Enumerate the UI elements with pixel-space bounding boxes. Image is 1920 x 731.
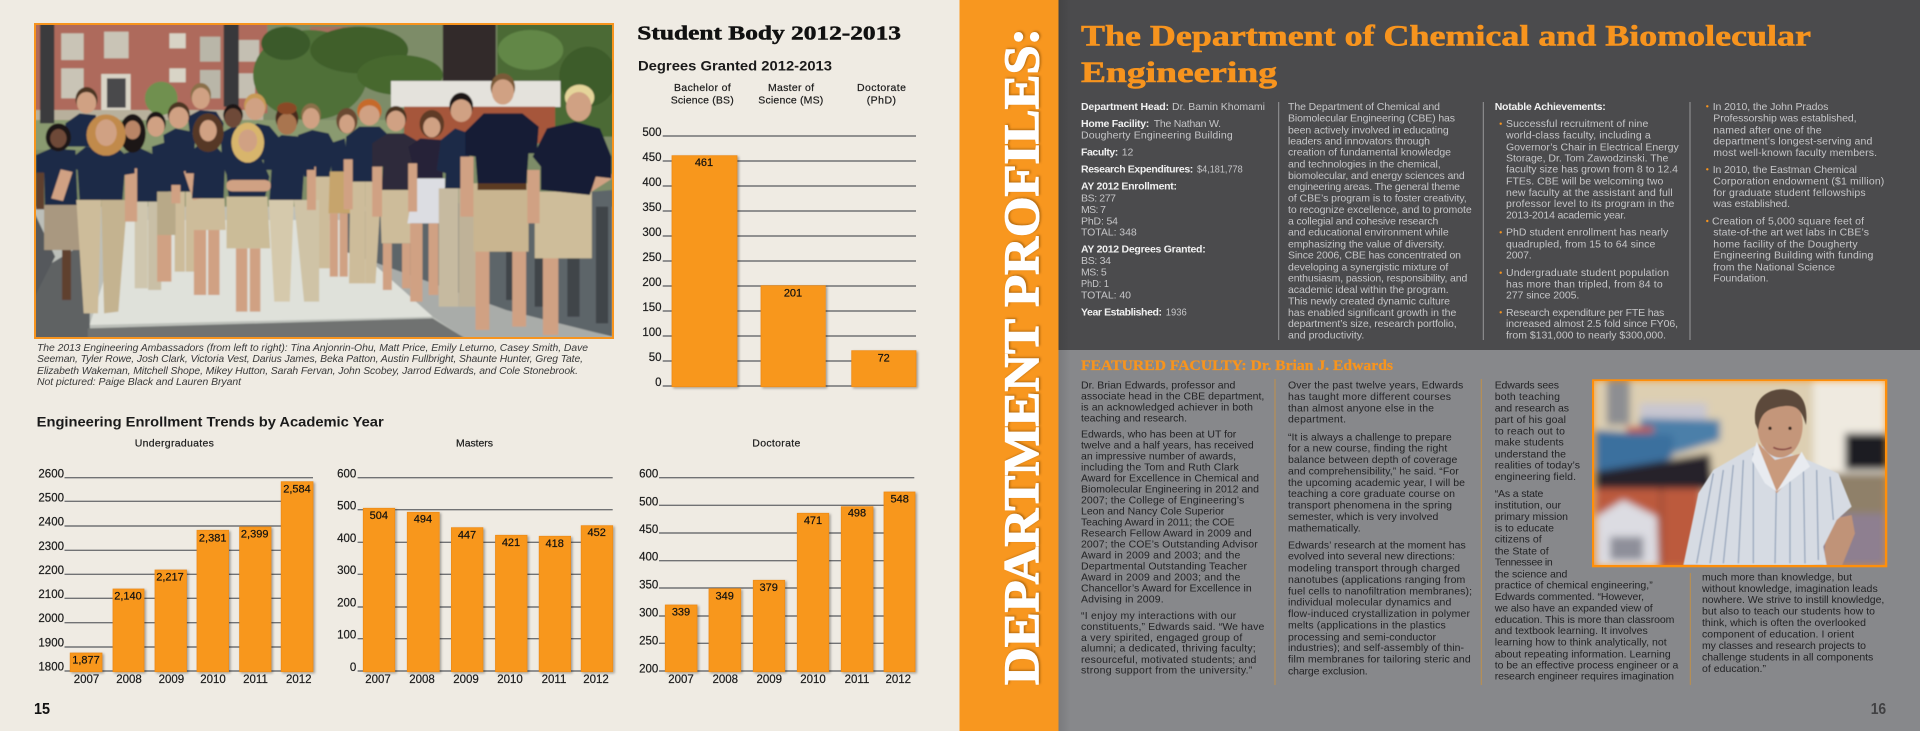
- orange spine band with vertical title: DEPARTMENT PROFILES:: [993, 28, 1049, 685]
- faculty text column 3: education. This is more than classroom: [1495, 614, 1675, 626]
- department description: This newly created dynamic culture: [1288, 295, 1450, 307]
- notable achievements: professor level to its program in the: [1506, 198, 1674, 210]
- notable achievements: In 2010, the John Prados: [1713, 101, 1828, 113]
- faculty text column 1: constituents,” Edwards said. “We have: [1081, 621, 1264, 633]
- bar chart: Undergraduates: 2100: [38, 589, 64, 601]
- bar chart: Masters: 400: [337, 533, 356, 545]
- bar chart: Undergraduates: 2000: [38, 613, 64, 625]
- notable achievements: Notable Achievements:: [1495, 101, 1606, 113]
- bar values: 201: [784, 288, 802, 300]
- faculty text column 2: balance between depth of coverage: [1288, 454, 1457, 466]
- faculty text column 2: Edwards’ research at the moment has: [1288, 540, 1466, 552]
- bar chart: Doctorate: 2007: [668, 674, 694, 686]
- bar chart: Undergraduates: 2600: [38, 468, 64, 480]
- department description: engineering areas. The general theme: [1288, 181, 1460, 193]
- notable achievements: new faculty at the assistant and full: [1506, 187, 1673, 199]
- department description: of CBE’s program is to foster creativity,: [1288, 192, 1467, 204]
- faculty text column 2: mathematically.: [1288, 523, 1361, 535]
- bar chart: Masters: 300: [337, 565, 356, 577]
- page number 16: 16: [1871, 701, 1887, 718]
- faculty text column 2: department.: [1288, 414, 1346, 426]
- bar chart: Masters: 2007: [365, 674, 391, 686]
- bar chart: Undergraduates: 2009: [159, 674, 184, 686]
- faculty text column 4: my classes and research projects to: [1702, 640, 1866, 652]
- department title: Engineering: [1081, 56, 1277, 89]
- faculty text column 1: is an acknowledged achiever in both: [1081, 401, 1253, 413]
- faculty text column 3: institution, our: [1495, 500, 1562, 512]
- faculty text column 1: Leon and Nancy Cole Superior: [1081, 506, 1225, 518]
- bar values: 461: [695, 157, 713, 169]
- faculty text column 1: Departmental Outstanding Teacher: [1081, 561, 1248, 573]
- bar chart: Masters: 504: [370, 510, 388, 522]
- faculty text column 1: twelve and a half years, has received: [1081, 440, 1254, 452]
- faculty text column 3: make students: [1495, 437, 1564, 449]
- bar chart: Masters: 100: [337, 630, 356, 642]
- photo: 2013 Engineering Ambassadors group: [34, 23, 616, 340]
- photo: Dr. Brian J. Edwards: [1592, 379, 1887, 567]
- column labels: Science (BS): [671, 94, 734, 106]
- bar chart: Masters: 2011: [542, 674, 566, 686]
- bar chart: Undergraduates: 2008: [116, 674, 142, 686]
- faculty text column 1: Award in 2009 and 2003; and the: [1081, 550, 1240, 562]
- column labels: (PhD): [867, 94, 896, 106]
- faculty text column 1: including the Tom and Ruth Clark: [1081, 462, 1239, 474]
- faculty text column 2: transport phenomena in the spring: [1288, 500, 1452, 512]
- heading: Enrollment Trends: Engineering Enrollment Trends by Academic Year: [37, 415, 385, 430]
- department facts: TOTAL: 40: [1081, 289, 1131, 301]
- column labels: Master of: [768, 82, 814, 94]
- faculty text column 2: has taught more different courses: [1288, 391, 1451, 403]
- notable achievements: was established.: [1712, 198, 1790, 210]
- photo caption: Seeman, Tyler Rowe, Josh Clark, Victoria Vest, Darius James, Beka Patton, Austin Fullbright, Shaunte Hunter, Greg Tate,: [37, 354, 583, 365]
- notable achievements: 2013-2014 academic year.: [1506, 210, 1626, 222]
- bar chart: Doctorate: 471: [804, 515, 822, 527]
- faculty text column 1: 2007; the COE’s Outstanding Advisor: [1081, 539, 1258, 551]
- faculty text column 4: without knowledge, imagination leads: [1701, 583, 1878, 595]
- page number 15: 15: [34, 701, 50, 718]
- bar chart: Masters: 421: [502, 537, 520, 549]
- heading: Student Body: Student Body 2012-2013: [637, 22, 901, 44]
- department description: creation of fundamental knowledge: [1288, 147, 1451, 159]
- faculty text column 1: [1081, 379, 1264, 677]
- notable achievements: state-of-the art wet labs in CBE’s: [1713, 227, 1869, 239]
- bar chart: Masters: 494: [414, 514, 432, 526]
- bar chart: Undergraduates: 2200: [38, 565, 64, 577]
- faculty text column 3: realities of today’s: [1495, 459, 1580, 471]
- faculty text column 3: both teaching: [1495, 391, 1560, 403]
- notable achievements: increased almost 2.5 fold since FY06,: [1506, 318, 1678, 330]
- faculty text column 2: “It is always a challenge to prepare: [1288, 431, 1452, 443]
- faculty text column 3: Edwards sees: [1495, 379, 1559, 391]
- notable achievements: [1495, 101, 1884, 341]
- photo caption: Elizabeth Wakeman, Mitchell Shope, Mikey Hutton, Sarah Fervan, John Scobey, Jarrod Edwards, and Cole Stonebrook.: [37, 366, 578, 377]
- photo caption: Not pictured: Paige Black and Lauren Bryant: [37, 377, 242, 388]
- faculty text column 4: challenge students in all components: [1702, 651, 1873, 663]
- faculty text column 2: processing and semi-conductor: [1288, 631, 1436, 643]
- department facts: [1081, 101, 1265, 319]
- faculty text column 1: resourceful, motivated students; and: [1081, 654, 1256, 666]
- heading: Degrees Granted: Degrees Granted 2012-2013: [638, 59, 832, 74]
- bars: [672, 156, 916, 387]
- bar chart: Masters: 418: [546, 538, 564, 550]
- department description: [1288, 101, 1472, 342]
- panel: featured faculty: [1058, 350, 1920, 731]
- bar chart: Doctorate: 379: [760, 582, 778, 594]
- notable achievements: Engineering Building with funding: [1713, 250, 1873, 262]
- department facts: Research Expenditures:: [1081, 164, 1193, 176]
- bar chart: Doctorate: 2012: [886, 674, 911, 686]
- department facts: MS: 5: [1081, 267, 1107, 279]
- faculty text column 2: for a new course, finding the right: [1288, 442, 1447, 454]
- y axis labels: 350: [642, 202, 662, 214]
- notable achievements: 2007.: [1506, 250, 1532, 262]
- bar chart: Doctorate: 2011: [845, 674, 869, 686]
- left page background: [0, 0, 960, 731]
- notable achievements: quadrupled, from 15 to 64 since: [1506, 238, 1655, 250]
- department facts: Home Facility:: [1081, 118, 1149, 130]
- faculty text column 1: an impressive number of awards,: [1081, 451, 1236, 463]
- y axis labels: [642, 127, 662, 389]
- faculty text column 1: associate head in the CBE department,: [1081, 390, 1264, 402]
- department facts: Department Head:: [1081, 101, 1169, 113]
- bar chart: Doctorate: 349: [716, 590, 734, 602]
- bar chart: Doctorate: 300: [639, 608, 658, 620]
- faculty text column 2: film membranes for tailoring steric and: [1288, 654, 1471, 666]
- department description: biomolecular, and energy sciences and: [1288, 170, 1465, 182]
- notable achievements: Research expenditure per FTE has: [1506, 307, 1664, 319]
- orange spine band with vertical title: [960, 0, 1058, 731]
- bar chart: Undergraduates: 1800: [38, 662, 64, 674]
- faculty text column 1: Award in 2009 and 2003; and the: [1081, 572, 1240, 584]
- bar chart: Masters: Masters: [456, 437, 493, 449]
- bar chart: Undergraduates: 2,399: [241, 528, 268, 540]
- faculty text column 2: individual molecular dynamics and: [1288, 596, 1451, 608]
- notable achievements: from the National Science: [1713, 261, 1835, 273]
- bar chart: Undergraduates: 2,381: [199, 532, 226, 544]
- faculty text column 1: Research Fellow Award in 2009 and: [1081, 528, 1252, 540]
- bar chart: Undergraduates: 2012: [286, 674, 312, 686]
- bar values: [695, 157, 890, 364]
- faculty text column 3: practice of chemical engineering,”: [1495, 580, 1653, 592]
- department description: emphasizing the value of diversity.: [1288, 238, 1445, 250]
- featured faculty heading: FEATURED FACULTY: Dr. Brian J. Edwards: [1081, 358, 1393, 374]
- faculty text column 2: [1288, 379, 1472, 677]
- department description: has enabled significant growth in the: [1288, 307, 1456, 319]
- faculty text column 3: we also have an expanded view of: [1494, 602, 1653, 614]
- faculty text column 4: much more than knowledge, but: [1702, 571, 1852, 583]
- department description: developing a synergistic mixture of: [1288, 261, 1448, 273]
- y axis labels: 500: [642, 127, 662, 139]
- bar chart: Masters: 200: [337, 598, 356, 610]
- bar chart: Doctorate: 350: [639, 580, 658, 592]
- notable achievements: Governor’s Chair in Electrical Energy: [1506, 141, 1679, 153]
- faculty text column 2: melts (applications in the plastics: [1288, 620, 1446, 632]
- faculty text column 1: Teaching Award in 2011; the COE: [1081, 517, 1235, 529]
- notable achievements: from $131,000 to nearly $300,000.: [1506, 329, 1666, 341]
- faculty text column 4: but also to teach our students how to: [1702, 605, 1875, 617]
- y axis labels: 300: [642, 227, 662, 239]
- faculty text column 3: to be an effective process engineer or a: [1495, 660, 1679, 672]
- back row: [65, 113, 96, 147]
- department description: enthusiasm, passion, responsibility, and: [1288, 272, 1467, 284]
- bar chart: Doctorate: 498: [848, 508, 866, 520]
- bar chart: Doctorate: 2008: [713, 674, 738, 686]
- bar chart: Doctorate: 339: [672, 606, 690, 618]
- column labels: Bachelor of: [674, 82, 731, 94]
- department description: and productivity.: [1288, 330, 1364, 342]
- faculty text column 2: and comprehensibility,” he said. “For: [1288, 465, 1459, 477]
- bar chart: Undergraduates: [38, 437, 313, 686]
- faculty text column 2: than almost anyone else in the: [1288, 402, 1434, 414]
- department description: and educational environment while: [1288, 227, 1449, 239]
- faculty text column 2: evolved into several new directions:: [1288, 551, 1455, 563]
- panel: department profile: [1058, 0, 1920, 350]
- faculty text column 3: the State of: [1495, 545, 1549, 557]
- bar chart: Undergraduates: 2,584: [283, 483, 311, 495]
- faculty text column 3: learning how to think analytically, not: [1495, 637, 1667, 649]
- faculty text column 4: think, which is often the overlooked: [1702, 617, 1866, 629]
- faculty text column 3: to reach out to: [1495, 425, 1565, 437]
- bar chart: Masters: 452: [588, 527, 606, 539]
- bar chart: Doctorate: 600: [639, 468, 658, 480]
- faculty text column 1: Chancellor’s Award for Excellence in: [1081, 583, 1252, 595]
- notable achievements: Foundation.: [1713, 272, 1769, 284]
- bar chart: Undergraduates: 1,877: [72, 654, 100, 666]
- notable achievements: most well-known faculty members.: [1713, 147, 1877, 159]
- faculty text column 1: a very spirited, engaged group of: [1081, 632, 1242, 644]
- faculty text column 3: Edwards commented. “However,: [1495, 591, 1644, 603]
- bar chart: Masters: 447: [458, 529, 476, 541]
- faculty text column 2: flow-induced crystallization in polymer: [1288, 608, 1470, 620]
- y axis labels: 100: [642, 327, 662, 339]
- bar chart: Masters: 0: [350, 662, 356, 674]
- bar chart: Masters: 2012: [583, 674, 609, 686]
- notable achievements: PhD student enrollment has nearly: [1506, 227, 1669, 239]
- notable achievements: named after one of the: [1713, 124, 1822, 136]
- faculty text column 2: modeling transport through charged: [1288, 562, 1460, 574]
- faculty text column 2: nanotubes (applications ranging from: [1288, 574, 1466, 586]
- department description: Since 2006, CBE has concentrated on: [1288, 250, 1461, 262]
- faculty text column 3: about repeating information. Learning: [1495, 648, 1671, 660]
- bar chart: Doctorate: 450: [639, 524, 658, 536]
- bar chart: Masters: 2009: [453, 674, 479, 686]
- notable achievements: 277 since 2005.: [1506, 289, 1579, 301]
- bar chart: Undergraduates: 1900: [38, 637, 64, 649]
- department description: The Department of Chemical and: [1288, 101, 1440, 113]
- department description: and technologies in the chemical,: [1288, 158, 1441, 170]
- department facts: BS: 277: [1081, 192, 1116, 204]
- department description: academic ideal within the program.: [1288, 284, 1449, 296]
- y axis labels: 400: [642, 177, 662, 189]
- faculty text column 3: Tennessee in: [1495, 557, 1553, 569]
- column labels: Doctorate: [857, 82, 906, 94]
- bar chart: Masters: [337, 437, 613, 686]
- department title: The Department of Chemical and Biomolecular: [1081, 20, 1811, 53]
- bar chart: Doctorate: Doctorate: [752, 437, 800, 449]
- y axis labels: 150: [642, 302, 662, 314]
- bar chart: Undergraduates: 2,217: [156, 572, 184, 584]
- faculty text column 1: 2007; the College of Engineering’s: [1081, 495, 1244, 507]
- department title: [1081, 20, 1811, 89]
- notable achievements: Creation of 5,000 square feet of: [1712, 216, 1864, 228]
- bar values: 72: [878, 352, 890, 364]
- notable achievements: Corporation endowment ($1 million): [1713, 175, 1884, 187]
- faculty text column 1: strong support from the university.”: [1081, 665, 1253, 677]
- faculty text column 1: Dr. Brian Edwards, professor and: [1081, 379, 1235, 391]
- department facts: The Nathan W.: [1154, 118, 1221, 130]
- front left group: [62, 250, 71, 300]
- faculty text column 1: Award for Excellence in Chemical and: [1081, 473, 1259, 485]
- department facts: BS: 34: [1081, 255, 1111, 267]
- faculty text column 3: is to educate: [1495, 523, 1554, 535]
- notable achievements: FTEs. CBE will be welcoming two: [1506, 175, 1663, 187]
- faculty text column 2: teaching a core graduate course on: [1288, 488, 1455, 500]
- department description: been actively involved in educating: [1288, 124, 1449, 136]
- notable achievements: Professorship was established,: [1713, 113, 1857, 125]
- bar chart: Doctorate: 2009: [757, 674, 782, 686]
- department facts: AY 2012 Degrees Granted:: [1081, 243, 1206, 255]
- department facts: 1936: [1166, 307, 1187, 319]
- y axis labels: 0: [655, 377, 662, 389]
- bar chart: Undergraduates: 2011: [243, 674, 268, 686]
- faculty text column 2: industries); and self-assembly of thin-: [1288, 642, 1464, 654]
- faculty text column 1: Advising in 2009.: [1081, 593, 1164, 605]
- department facts: AY 2012 Enrollment:: [1081, 181, 1177, 193]
- faculty text column 2: fuel cells to nanofiltration membranes);: [1288, 585, 1472, 597]
- bar chart: Undergraduates: 2007: [74, 674, 99, 686]
- faculty text column 3: [1494, 379, 1679, 683]
- faculty text column 3: citizens of: [1495, 534, 1542, 546]
- bar chart: Masters: 500: [337, 501, 356, 513]
- department facts: Year Established:: [1081, 307, 1162, 319]
- bar chart: Doctorate: 200: [639, 664, 658, 676]
- department facts: PhD: 1: [1081, 278, 1109, 290]
- bar chart: Doctorate: 250: [639, 636, 658, 648]
- faculty text column 4: of education.”: [1702, 663, 1766, 675]
- faculty text column 2: charge exclusion.: [1288, 665, 1368, 677]
- department facts: Faculty:: [1081, 147, 1118, 159]
- y axis labels: 450: [642, 152, 662, 164]
- faculty text column 4: component of education. I orient: [1702, 629, 1854, 641]
- y axis labels: 200: [642, 277, 662, 289]
- bar chart: Doctorate: 2010: [800, 674, 826, 686]
- photo caption: The 2013 Engineering Ambassadors (from left to right): Tina Anjonrin-Ohu, Matt Price, Emily Leturno, Casey Smith, Dave: [37, 343, 588, 354]
- bar chart: Masters: 600: [337, 468, 356, 480]
- notable achievements: home facility of the Dougherty: [1713, 238, 1858, 250]
- faculty text column 3: understand the: [1495, 448, 1566, 460]
- department facts: TOTAL: 348: [1081, 226, 1137, 238]
- notable achievements: Undergraduate student population: [1506, 267, 1669, 279]
- notable achievements: has more than tripled, from 84 to: [1506, 278, 1663, 290]
- big men: [476, 250, 489, 330]
- notable achievements: for graduate student fellowships: [1713, 187, 1866, 199]
- faculty text column 1: “I enjoy my interactions with our: [1081, 610, 1237, 622]
- department description: department’s size, research portfolio,: [1288, 318, 1457, 330]
- faculty text column 4: [1701, 571, 1884, 675]
- faculty text column 1: Edwards, who has been at UT for: [1081, 429, 1237, 441]
- department description: leaders and innovators through: [1288, 135, 1430, 147]
- faculty text column 3: engineering field.: [1495, 471, 1576, 483]
- photo caption: [37, 343, 588, 388]
- bar chart: Doctorate: 500: [639, 496, 658, 508]
- faculty text column 1: teaching and research.: [1081, 412, 1187, 424]
- faculty text column 3: research engineer requires imagination: [1495, 671, 1674, 683]
- bar chart: Doctorate: [639, 437, 915, 686]
- faculty text column 3: the science and: [1495, 568, 1568, 580]
- faculty text column 1: Biomolecular Engineering in 2012 and: [1081, 484, 1259, 496]
- department facts: $4,181,778: [1197, 164, 1243, 176]
- faculty text column 3: and textbook learning. It involves: [1495, 625, 1648, 637]
- department description: Biomolecular Engineering (CBE) has: [1288, 113, 1455, 125]
- faculty text column 3: and research as: [1495, 403, 1569, 415]
- department facts: 12: [1122, 147, 1134, 159]
- faculty text column 3: “As a state: [1495, 488, 1544, 500]
- bar chart: Doctorate: 400: [639, 552, 658, 564]
- faculty text column 2: the upcoming academic year, I will be: [1288, 477, 1465, 489]
- notable achievements: Successful recruitment of nine: [1506, 118, 1648, 130]
- faculty text column 4: nowhere. We strive to instill knowledge,: [1702, 594, 1884, 606]
- column labels: [671, 82, 906, 106]
- notable achievements: In 2010, the Eastman Chemical: [1713, 164, 1857, 176]
- bar chart: Masters: 2008: [409, 674, 435, 686]
- y axis labels: 50: [649, 352, 662, 364]
- department facts: Dr. Bamin Khomami: [1172, 101, 1265, 113]
- notable achievements: department’s longest-serving and: [1713, 135, 1872, 147]
- department description: a collegial and cohesive research: [1288, 216, 1438, 228]
- bar chart: Masters: 2010: [497, 674, 523, 686]
- bar chart: Degrees Granted: [642, 82, 916, 389]
- notable achievements: Storage, Dr. Tom Zawodzinski. The: [1506, 152, 1668, 164]
- faculty text column 3: part of his goal: [1495, 414, 1566, 426]
- faculty text column 2: Over the past twelve years, Edwards: [1288, 379, 1463, 391]
- department facts: PhD: 54: [1081, 215, 1118, 227]
- column labels: Science (MS): [758, 94, 823, 106]
- bar chart: Undergraduates: 2,140: [114, 591, 142, 603]
- department facts: MS: 7: [1081, 204, 1106, 216]
- notable achievements: faculty size has grown from 8 to 12.4: [1506, 164, 1678, 176]
- bar chart: Doctorate: 548: [891, 494, 909, 506]
- faculty text column 1: alumni; a dedicated, thriving faculty;: [1081, 643, 1256, 655]
- department description: to recognize excellence, and to promote: [1288, 204, 1472, 216]
- bar chart: Undergraduates: 2400: [38, 517, 64, 529]
- y axis labels: 250: [642, 252, 662, 264]
- bar chart: Undergraduates: 2010: [200, 674, 226, 686]
- department facts: Dougherty Engineering Building: [1081, 130, 1233, 142]
- bar chart: Undergraduates: 2500: [38, 492, 64, 504]
- notable achievements: world-class faculty, including a: [1505, 130, 1651, 142]
- bar chart: Undergraduates: Undergraduates: [135, 437, 214, 449]
- bar chart: Undergraduates: 2300: [38, 541, 64, 553]
- faculty text column 2: semester, which is very involved: [1288, 511, 1438, 523]
- faculty text column 3: primary mission: [1495, 511, 1568, 523]
